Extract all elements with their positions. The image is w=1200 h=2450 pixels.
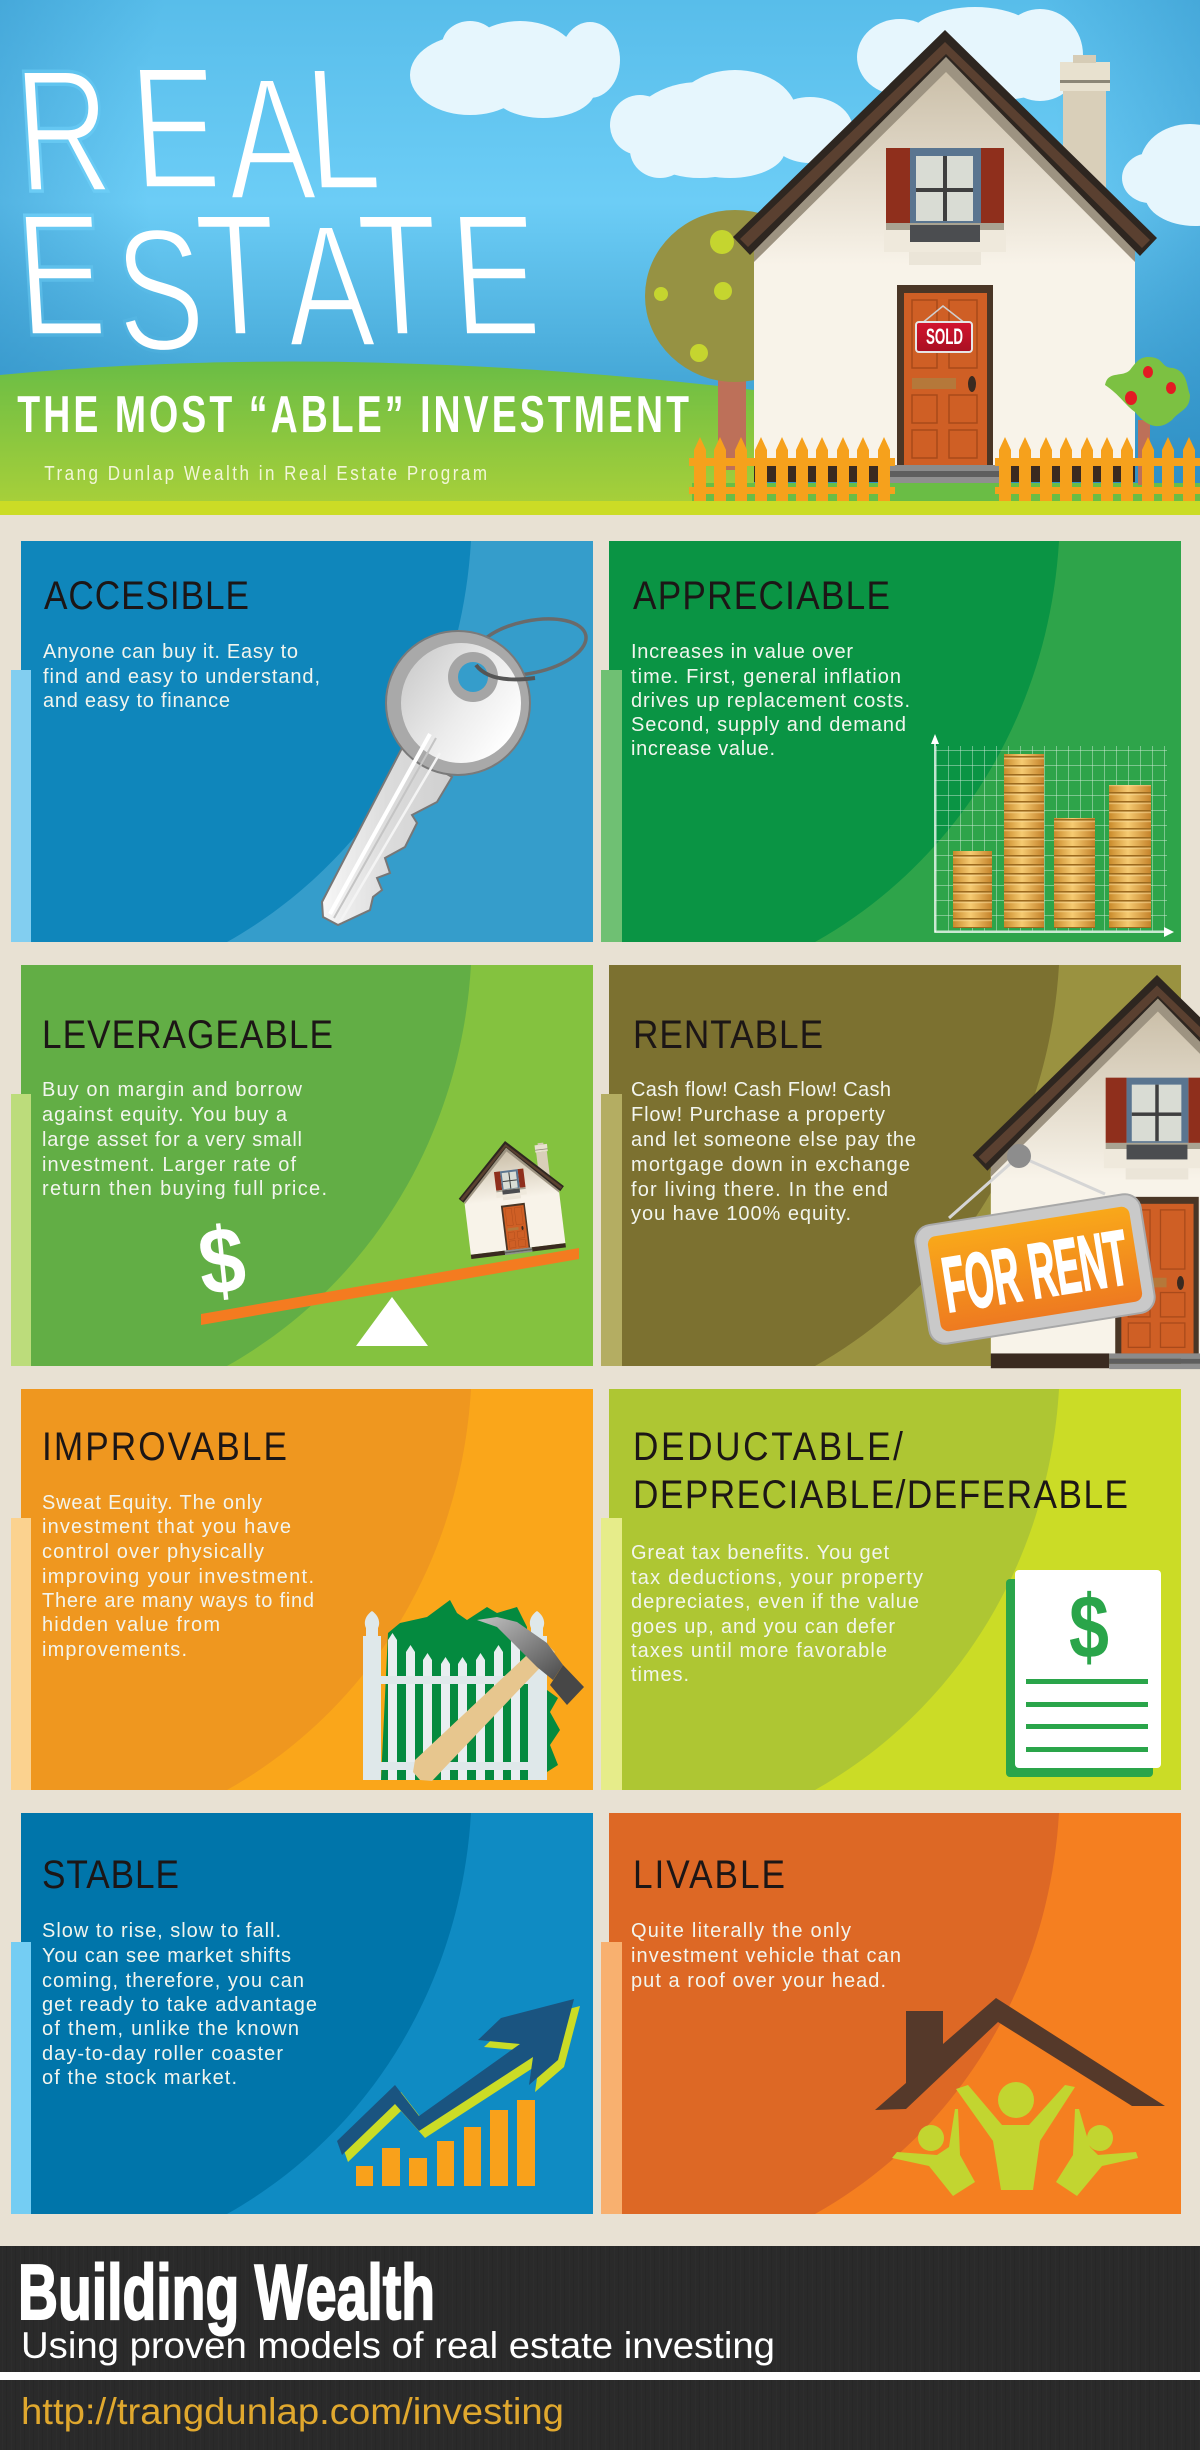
body text: coming, therefore, you can	[42, 1970, 304, 1992]
icon: fence and hammer	[363, 1600, 584, 1781]
heading: LIVABLE	[633, 1852, 785, 1896]
icon: family under roof	[875, 1998, 1165, 2196]
heading: DEDUCTABLE/	[633, 1424, 903, 1468]
footer	[0, 2246, 1200, 2450]
body text: day-to-day roller coaster	[42, 2043, 283, 2065]
body text: Second, supply and demand	[631, 714, 906, 736]
body text: depreciates, even if the value	[631, 1591, 919, 1613]
body text	[631, 1920, 901, 1992]
subtitle: THE MOST “ABLE” INVESTMENT	[17, 385, 689, 443]
body text: control over physically	[42, 1541, 264, 1563]
icon: seesaw	[201, 1248, 579, 1346]
panel: rentable	[601, 965, 1200, 1369]
body text: for living there. In the end	[631, 1179, 888, 1201]
body text	[42, 1079, 327, 1200]
body text: mortgage down in exchange	[631, 1154, 910, 1176]
icon: tiny house	[452, 1135, 571, 1260]
panel: leverageable	[11, 965, 593, 1366]
body text: investment that you have	[42, 1516, 291, 1538]
heading: ACCESIBLE	[44, 573, 249, 617]
title	[10, 31, 545, 387]
icon: dollar sign: $	[193, 1206, 250, 1315]
heading: DEPRECIABLE/DEFERABLE	[633, 1472, 1128, 1516]
icon: sold sign: SOLD	[926, 324, 963, 349]
chart: coin stacks	[931, 734, 1174, 937]
ground	[692, 483, 1200, 501]
body text	[631, 1542, 923, 1686]
body text: time. First, general inflation	[631, 666, 901, 688]
body text: Quite literally the only	[631, 1920, 851, 1942]
body text: increase value.	[631, 738, 775, 760]
body text: Anyone can buy it. Easy to	[43, 641, 298, 663]
clouds	[410, 7, 1200, 226]
body text: and let someone else pay the	[631, 1129, 916, 1151]
body text: Increases in value over	[631, 641, 853, 663]
panel: accesible	[11, 541, 593, 942]
body text: Buy on margin and borrow	[42, 1079, 303, 1101]
icon: left fence	[689, 437, 895, 501]
body text: hidden value from	[42, 1614, 220, 1636]
body text	[42, 1492, 314, 1661]
icon: right fence	[995, 437, 1200, 501]
body text: taxes until more favorable	[631, 1640, 887, 1662]
icon: key	[322, 610, 591, 925]
body text: find and easy to understand,	[43, 666, 320, 688]
icon: small apple tree	[1105, 357, 1190, 485]
body text: You can see market shifts	[42, 1945, 291, 1967]
footer dark band	[0, 2246, 1200, 2372]
body text: drives up replacement costs.	[631, 690, 910, 712]
body text	[631, 641, 910, 760]
icon: tax document: $	[1069, 1578, 1109, 1678]
body text: There are many ways to find	[42, 1590, 314, 1612]
icon: left tree	[645, 210, 825, 470]
panel: stable	[11, 1813, 593, 2214]
icon: for rent sign	[913, 1144, 1157, 1346]
panel: improvable	[11, 1389, 593, 1790]
body text: investment vehicle that can	[631, 1945, 901, 1967]
icon: tax document	[1006, 1570, 1161, 1777]
body text	[631, 1079, 916, 1225]
chart: rising bars and arrow	[337, 1999, 580, 2186]
heading: LEVERAGEABLE	[42, 1012, 333, 1056]
hill	[0, 362, 754, 501]
body text: Flow! Purchase a property	[631, 1104, 885, 1126]
program name: Trang Dunlap Wealth in Real Estate Program	[44, 462, 487, 484]
body text: return then buying full price.	[42, 1178, 327, 1200]
body text: Cash flow! Cash Flow! Cash	[631, 1079, 891, 1101]
heading	[633, 1424, 1128, 1516]
sky	[0, 0, 1200, 483]
footer link band	[0, 2380, 1200, 2450]
body text: Sweat Equity. The only	[42, 1492, 262, 1514]
body text: tax deductions, your property	[631, 1567, 923, 1589]
body text: Slow to rise, slow to fall.	[42, 1920, 281, 1942]
body text: and easy to finance	[43, 690, 230, 712]
body text: investment. Larger rate of	[42, 1154, 296, 1176]
footer white divider	[0, 2372, 1200, 2380]
icon: house	[973, 975, 1200, 1369]
body text: of the stock market.	[42, 2067, 237, 2089]
panel: livable	[601, 1813, 1181, 2214]
body text: put a roof over your head.	[631, 1970, 886, 1992]
panel: appreciable	[601, 541, 1181, 942]
body text: get ready to take advantage	[42, 1994, 317, 2016]
body text: improving your investment.	[42, 1566, 314, 1588]
body text: of them, unlike the known	[42, 2018, 299, 2040]
lime band	[0, 501, 1200, 515]
body text	[43, 641, 320, 712]
body text: you have 100% equity.	[631, 1203, 851, 1225]
icon: house	[733, 30, 1157, 483]
body text	[42, 1920, 317, 2089]
heading: RENTABLE	[633, 1012, 823, 1056]
heading: STABLE	[42, 1852, 179, 1896]
panel: deductable	[601, 1389, 1181, 1790]
title: ESTATE	[11, 178, 545, 387]
body text: improvements.	[42, 1639, 187, 1661]
body text: goes up, and you can defer	[631, 1616, 895, 1638]
body text: against equity. You buy a	[42, 1104, 288, 1126]
body text: times.	[631, 1664, 689, 1686]
heading: APPRECIABLE	[633, 573, 890, 617]
body text: Great tax benefits. You get	[631, 1542, 889, 1564]
footer url: http://trangdunlap.com/investing	[21, 2391, 564, 2432]
footer heading: Building Wealth	[18, 2248, 435, 2336]
body text: large asset for a very small	[42, 1129, 302, 1151]
heading: IMPROVABLE	[42, 1424, 287, 1468]
icon: sold sign	[916, 306, 972, 352]
hero header	[0, 0, 1200, 515]
title: REAL	[10, 31, 385, 236]
footer subheading: Using proven models of real estate investing	[21, 2325, 775, 2366]
